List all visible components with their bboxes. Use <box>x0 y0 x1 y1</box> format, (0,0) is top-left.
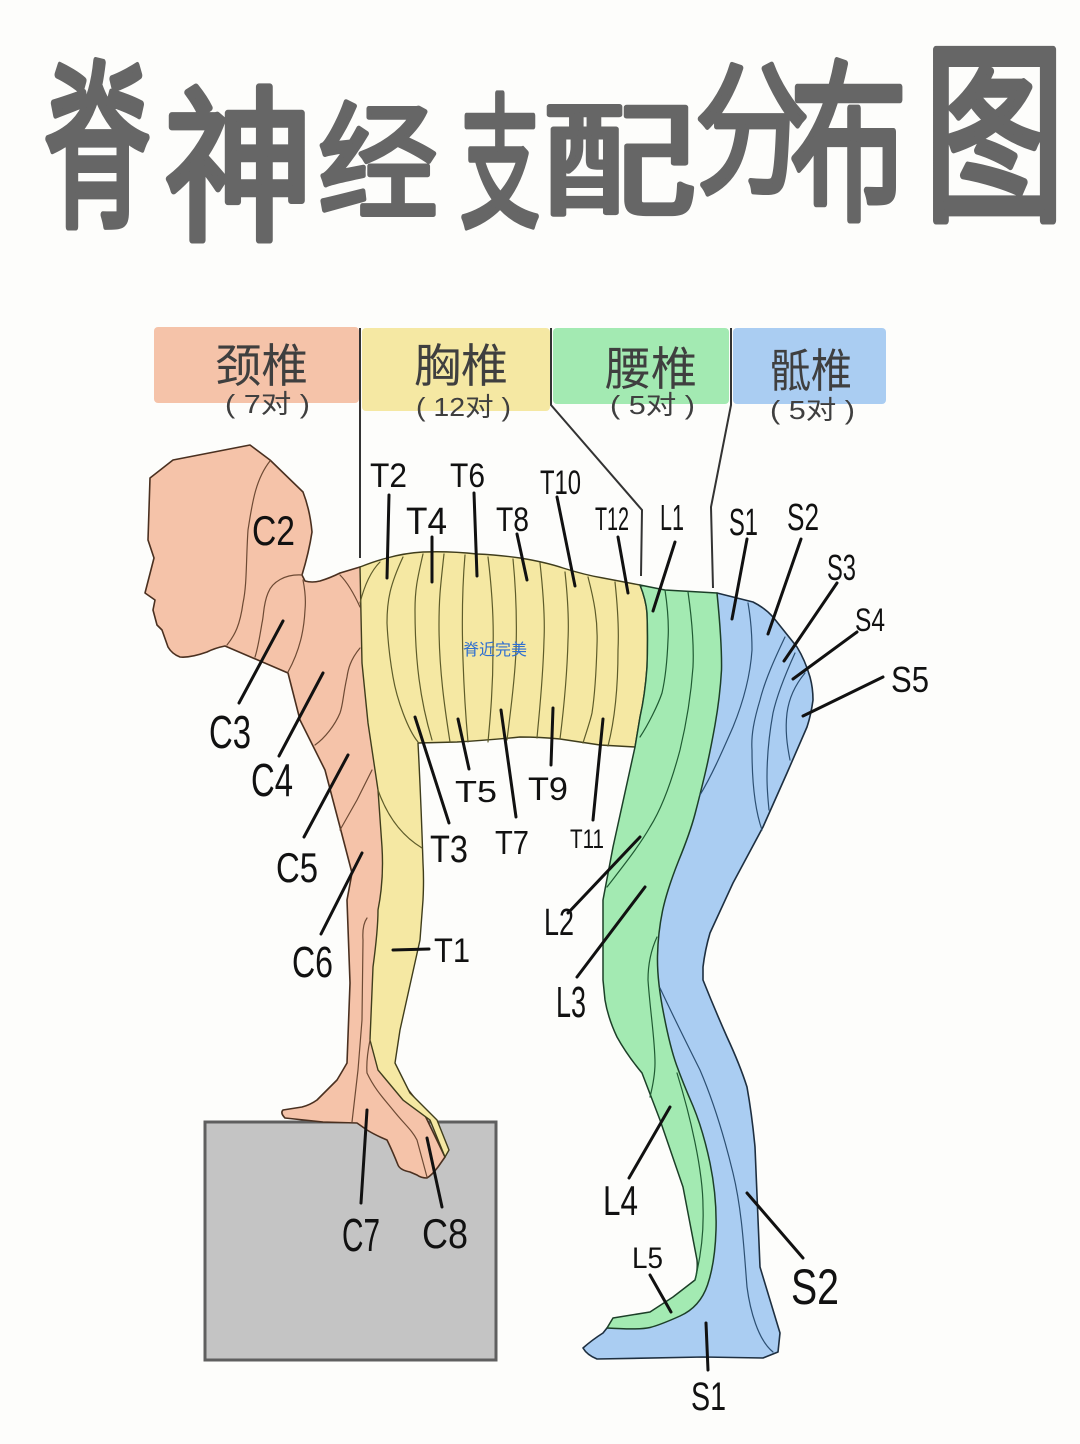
T5 <box>455 719 497 809</box>
title: 配 <box>541 93 696 231</box>
S5: S5 <box>891 659 929 700</box>
T9: T9 <box>528 771 568 807</box>
header: thoracic <box>362 328 550 422</box>
T4: T4 <box>406 501 447 543</box>
T8: T8 <box>496 501 529 539</box>
T10 <box>540 464 581 586</box>
S4 <box>793 602 885 679</box>
L1: L1 <box>660 497 684 538</box>
title <box>44 30 1065 263</box>
T6 <box>450 457 485 576</box>
T3: T3 <box>430 829 468 871</box>
C6: C6 <box>292 938 333 987</box>
cervical dermatome lines <box>227 461 427 1177</box>
labels: neck and arm <box>209 507 470 1261</box>
T1: T1 <box>434 932 470 970</box>
title: 图 <box>924 30 1065 247</box>
T12 <box>595 501 629 593</box>
header: sacral: ( 5对 ) <box>770 395 855 425</box>
S1 at foot <box>691 1323 726 1419</box>
title: 脊 <box>44 51 151 252</box>
watermark: 脊近完美 <box>463 641 527 659</box>
thoracic dermatome lines <box>360 554 618 848</box>
bracket lines from headers to spine <box>360 328 731 588</box>
S4: S4 <box>855 602 885 638</box>
lumbar region: green <box>603 585 722 1329</box>
title: 支 <box>460 83 540 247</box>
L3 <box>556 887 645 1027</box>
L4 <box>603 1107 670 1224</box>
S3 <box>784 547 856 661</box>
T1 <box>393 932 470 970</box>
S1 <box>729 502 758 619</box>
L5: L5 <box>632 1242 663 1275</box>
T5: T5 <box>455 774 497 809</box>
L1 <box>653 497 684 611</box>
labels: lumbar <box>544 497 684 1312</box>
lumbar dermatome lines <box>607 590 703 1280</box>
header: cervical <box>154 327 359 419</box>
labels: thoracic <box>370 457 629 871</box>
T7 <box>495 710 529 861</box>
header: lumbar <box>553 328 729 420</box>
C5 <box>276 755 348 891</box>
header: lumbar: ( 5对 ) <box>610 390 695 420</box>
title: 神 <box>164 76 313 263</box>
header: thoracic: 胸椎 <box>414 340 508 392</box>
T3 <box>415 717 468 871</box>
C8 <box>422 1138 468 1257</box>
header: sacral <box>733 328 886 425</box>
C3: C3 <box>209 706 251 758</box>
thoracic region: yellow <box>360 552 648 1157</box>
S5 <box>803 659 929 716</box>
S2 <box>768 497 819 634</box>
S1 at foot: S1 <box>691 1375 726 1419</box>
T11 <box>570 719 604 854</box>
C4 <box>251 673 323 806</box>
C8: C8 <box>422 1210 468 1257</box>
header: cervical: 颈椎 <box>215 340 308 392</box>
C2: C2 <box>252 507 295 554</box>
C4: C4 <box>251 754 293 806</box>
header: sacral: 骶椎 <box>770 345 852 397</box>
T2: T2 <box>370 457 407 495</box>
C5: C5 <box>276 844 318 891</box>
T7: T7 <box>495 824 529 861</box>
L4: L4 <box>603 1177 638 1224</box>
T10: T10 <box>540 464 581 502</box>
header: cervical: ( 7对 ) <box>225 389 310 419</box>
C6 <box>292 853 362 987</box>
T6: T6 <box>450 457 485 495</box>
S2: S2 <box>787 497 819 539</box>
grey box <box>205 1122 496 1360</box>
C7 <box>342 1110 380 1261</box>
C7: C7 <box>342 1209 380 1261</box>
T4 <box>406 501 447 582</box>
L3: L3 <box>556 978 586 1027</box>
S2 at ankle: S2 <box>791 1259 839 1315</box>
sacral region: blue <box>583 593 813 1359</box>
title: 经 <box>318 95 438 236</box>
C3 <box>209 621 283 758</box>
T12: T12 <box>595 501 629 537</box>
S1: S1 <box>729 502 758 544</box>
L5 <box>632 1242 671 1312</box>
L2: L2 <box>544 902 574 944</box>
T2 <box>370 457 407 578</box>
T11: T11 <box>570 824 604 854</box>
T9 <box>528 708 568 807</box>
S2 at ankle <box>747 1193 839 1315</box>
title: 布 <box>790 50 907 243</box>
header: lumbar: 腰椎 <box>605 343 697 395</box>
body figure <box>145 445 813 1359</box>
sacral dermatome lines <box>660 603 805 1352</box>
cervical region: salmon <box>145 445 445 1178</box>
labels: sacral <box>691 497 929 1419</box>
header: thoracic: ( 12对 ) <box>416 392 511 422</box>
S3: S3 <box>827 547 856 588</box>
title: 分 <box>695 54 809 213</box>
L2 <box>544 837 640 944</box>
T8 <box>496 501 529 580</box>
